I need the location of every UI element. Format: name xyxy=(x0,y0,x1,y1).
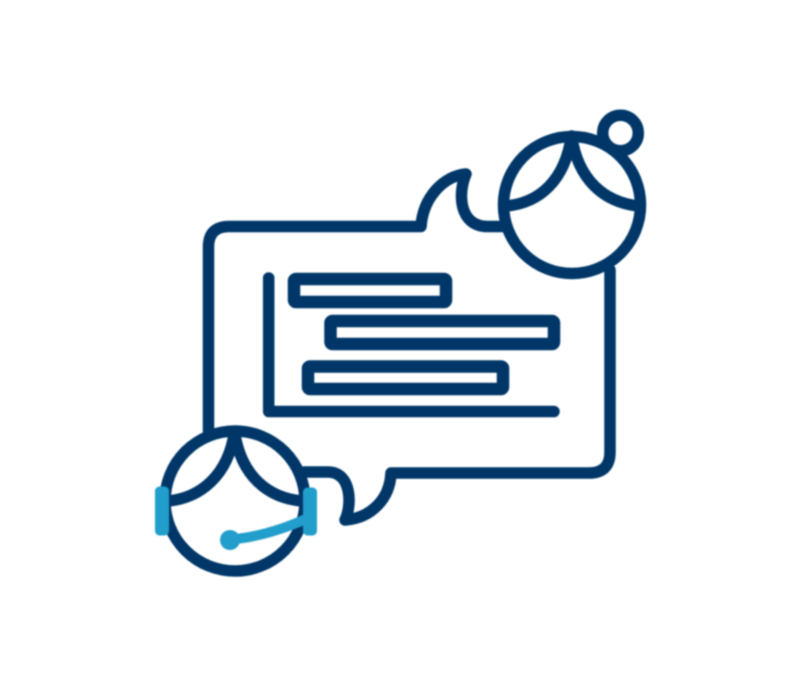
chart axes xyxy=(269,278,554,412)
bar: top xyxy=(294,279,446,302)
bar: bottom xyxy=(308,366,503,389)
icon: customer avatar xyxy=(504,115,640,274)
bar: middle xyxy=(330,321,554,344)
icon: agent headset xyxy=(158,490,314,550)
icon: agent avatar xyxy=(165,431,305,571)
speech bubble outline xyxy=(208,174,610,520)
